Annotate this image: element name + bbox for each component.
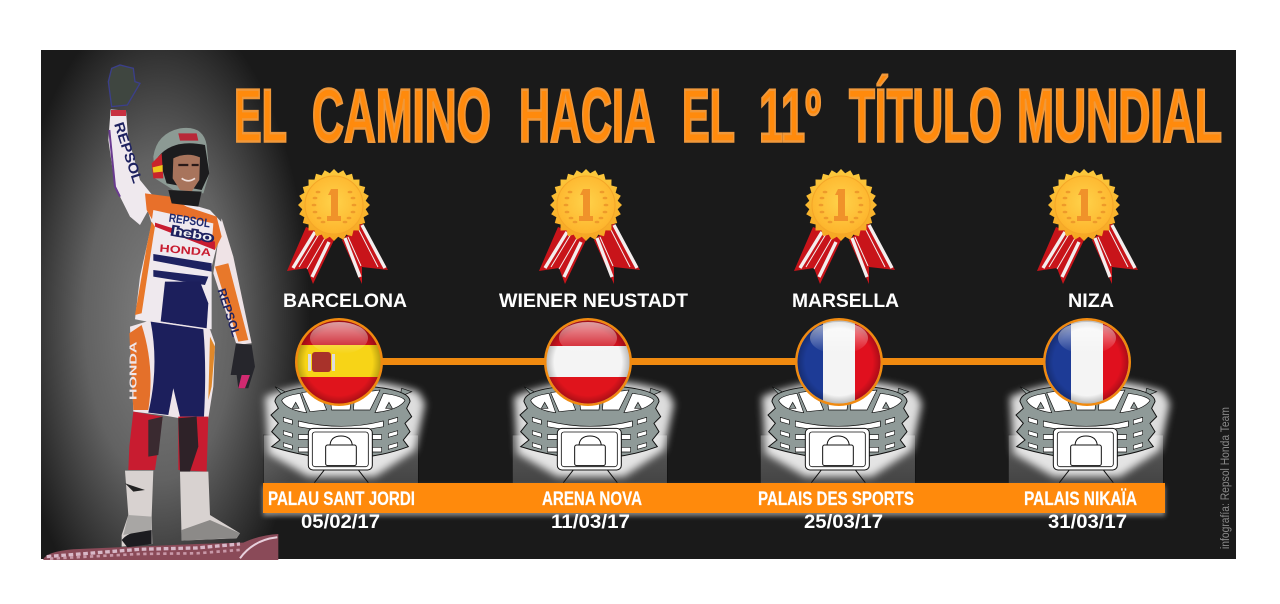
panel: grey glow behind rider [41, 50, 311, 559]
dates [301, 512, 1127, 533]
rider: hebo [172, 225, 214, 244]
flag: France (Niza) [1043, 318, 1131, 406]
collar [168, 190, 202, 207]
rider: HONDA [159, 243, 212, 259]
raised glove [108, 65, 140, 107]
credit: infografía: Repsol Honda Team [1220, 407, 1232, 549]
title: 11º [759, 74, 821, 158]
venue band: ARENA NOVA [542, 489, 642, 510]
panel: background [41, 50, 1236, 559]
infographic [41, 50, 1236, 560]
lower glove [231, 343, 255, 388]
connector line [378, 358, 1058, 365]
dates: 05/02/17 [301, 512, 380, 533]
dates: 25/03/17 [804, 512, 883, 533]
flag: France (Marsella) [795, 318, 883, 406]
venue band: PALAIS DES SPORTS [758, 489, 914, 510]
city labels: NIZA [1068, 290, 1114, 312]
city labels [283, 290, 1114, 312]
medal: Wiener Neustadt [539, 169, 640, 284]
city labels: BARCELONA [283, 290, 407, 312]
raised arm [108, 109, 155, 225]
title: TÍTULO [849, 74, 1002, 158]
title: EL [234, 74, 287, 158]
medal: Marsella [794, 169, 895, 284]
city labels: WIENER NEUSTADT [499, 290, 688, 312]
torso [135, 193, 223, 329]
far arm [213, 218, 252, 345]
venue band: PALAIS NIKAÏA [1024, 489, 1137, 510]
city labels: MARSELLA [792, 290, 899, 312]
stadium: Palau Sant Jordi [263, 380, 425, 484]
boots [122, 471, 153, 547]
flag: Spain [295, 318, 383, 406]
dates: 11/03/17 [551, 512, 630, 533]
rider [108, 65, 255, 547]
medal: Niza [1037, 169, 1138, 284]
venue band [263, 483, 1165, 516]
stadium: Arena Nova [512, 380, 674, 484]
legs [130, 320, 215, 418]
title: HACIA [519, 74, 655, 158]
title: CAMINO [312, 74, 491, 158]
stadium: Palais Nikaïa [1008, 380, 1170, 484]
title [234, 74, 1222, 158]
venue band: PALAU SANT JORDI [268, 489, 415, 510]
knees [128, 412, 163, 470]
rider: HONDA [129, 342, 140, 400]
helmet [153, 128, 209, 193]
rider: REPSOL [111, 120, 146, 186]
medal: Barcelona [287, 169, 388, 284]
platform [43, 534, 278, 560]
title: EL [682, 74, 735, 158]
dates: 31/03/17 [1048, 512, 1127, 533]
flag: Austria [544, 318, 632, 406]
rider: REPSOL [168, 211, 211, 230]
face [173, 155, 200, 192]
rider: REPSOL [214, 287, 243, 338]
stadium: Palais des Sports [760, 380, 922, 484]
